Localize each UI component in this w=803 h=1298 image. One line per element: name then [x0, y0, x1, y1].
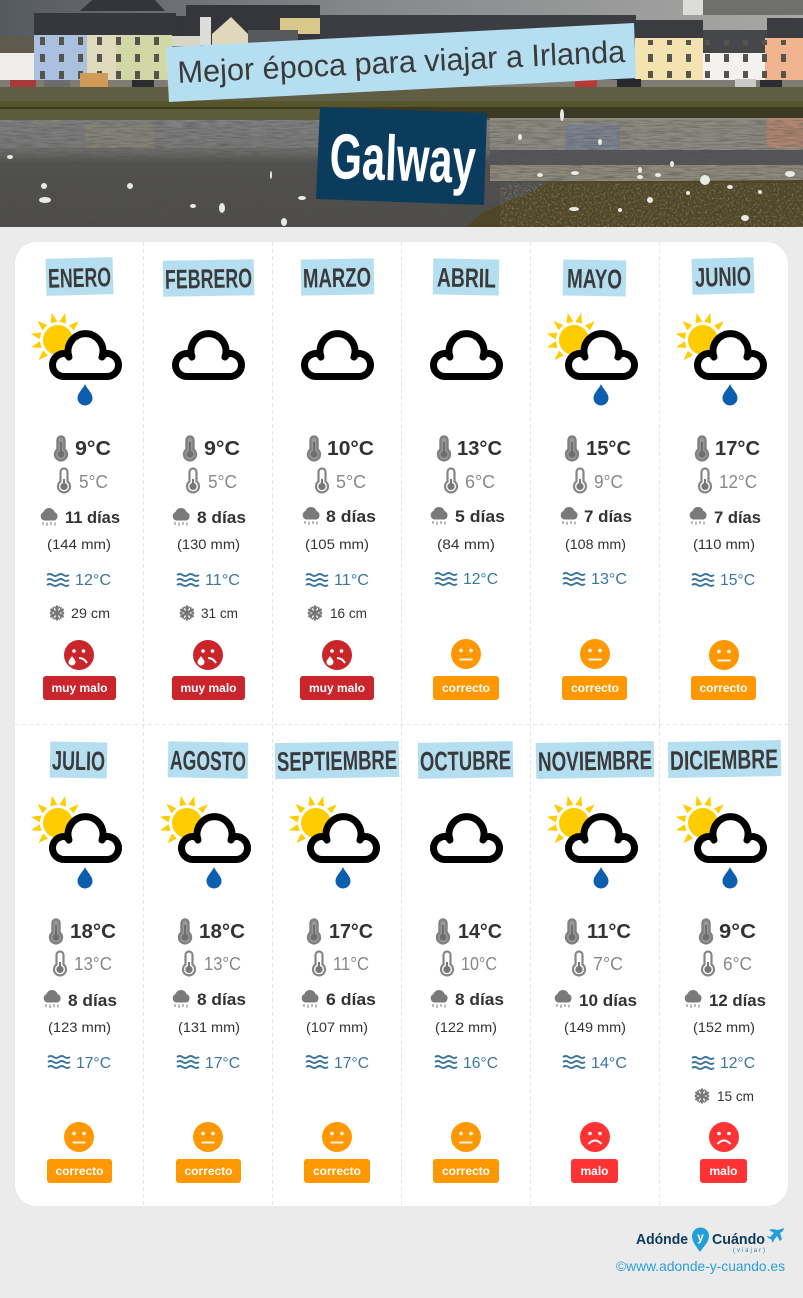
- sea temperature: 11°C: [205, 572, 240, 589]
- website link: ©www.adonde-y-cuando.es: [616, 1258, 785, 1274]
- logo: Adónde y Cuándo: Cuándo: [712, 1231, 765, 1248]
- sea temperature: [435, 1055, 498, 1072]
- sea temperature: [692, 1055, 755, 1072]
- rating: muy malo: [172, 640, 245, 700]
- snow: 16 cm: [330, 605, 367, 621]
- min temperature: 11°C: [333, 954, 369, 974]
- heading: febrero: FEBRERO: [165, 263, 252, 295]
- rainy days: 8 días: [68, 991, 117, 1010]
- icon: cloud: [304, 334, 370, 376]
- rainfall: (130 mm): [177, 536, 240, 552]
- logo: Adónde y Cuándo: (viajar): [733, 1248, 765, 1254]
- month: noviembre: [536, 741, 654, 1183]
- rainy days: [173, 508, 246, 527]
- rainy days: [685, 990, 766, 1010]
- header photo: Galway waterfront: [0, 0, 803, 227]
- rainy days: 12 días: [709, 991, 766, 1010]
- icon: sun, cloud and rain: [159, 795, 248, 888]
- title ribbon: [166, 23, 636, 102]
- rainfall: (152 mm): [693, 1019, 755, 1035]
- month: junio: [675, 257, 764, 700]
- heading: febrero: [163, 259, 254, 297]
- heading: agosto: AGOSTO: [170, 745, 246, 777]
- rainy days: [431, 990, 504, 1009]
- month: abril: [431, 258, 505, 700]
- heading: junio: JUNIO: [695, 261, 751, 293]
- heading: mayo: MAYO: [567, 264, 622, 294]
- icon: sun, cloud and rain: [546, 312, 634, 406]
- rainy days: [303, 507, 376, 526]
- min temperature: 5°C: [208, 472, 237, 492]
- rainy days: 7 días: [584, 507, 632, 526]
- heading: noviembre: NOVIEMBRE: [538, 745, 652, 777]
- heading: abril: ABRIL: [437, 262, 496, 294]
- rating: correcto: correcto: [184, 1164, 233, 1178]
- max temperature: 10°C: [327, 438, 374, 460]
- heading: octubre: OCTUBRE: [420, 745, 511, 777]
- sea temperature: 12°C: [463, 571, 498, 588]
- min temperature: [183, 952, 241, 975]
- icon: map pin: y: [697, 1230, 704, 1244]
- max temperature: 17°C: [329, 921, 373, 943]
- snow: 31 cm: [201, 605, 238, 621]
- rainfall: (131 mm): [178, 1019, 240, 1035]
- heading: abril: [433, 258, 499, 296]
- min temperature: 9°C: [594, 472, 623, 492]
- icon: sun, cloud and rain: [675, 312, 764, 406]
- sea temperature: 14°C: [591, 1055, 627, 1072]
- rainfall: (110 mm): [693, 536, 755, 552]
- rating: malo: [700, 1122, 747, 1183]
- snow: 29 cm: [71, 605, 110, 621]
- max temperature: 18°C: [199, 921, 245, 943]
- sea temperature: 12°C: [75, 572, 111, 589]
- max temperature: [438, 436, 502, 460]
- heading: enero: ENERO: [48, 262, 111, 294]
- heading: octubre: [418, 741, 513, 779]
- min temperature: [445, 468, 495, 492]
- rating: correcto: correcto: [442, 1164, 490, 1178]
- sea temperature: [563, 1055, 627, 1072]
- min temperature: 10°C: [461, 954, 497, 974]
- min temperature: 5°C: [336, 472, 366, 492]
- month: septiembre: [275, 741, 399, 1183]
- rating: correcto: correcto: [699, 681, 748, 695]
- snow: [308, 605, 367, 621]
- sea temperature: [177, 572, 240, 589]
- rating: correcto: correcto: [571, 681, 619, 695]
- max temperature: 17°C: [715, 438, 760, 460]
- max temperature: 15°C: [586, 438, 631, 460]
- max temperature: [184, 436, 240, 460]
- month: enero: [30, 257, 120, 700]
- sea temperature: 11°C: [334, 572, 369, 589]
- max temperature: 9°C: [204, 438, 240, 460]
- rating: correcto: correcto: [313, 1164, 361, 1178]
- sea temperature: [177, 1055, 240, 1072]
- rating: malo: [571, 1122, 618, 1183]
- city name: Galway: [316, 107, 487, 205]
- sea temperature: 17°C: [76, 1055, 111, 1072]
- month: octubre: [418, 741, 513, 1183]
- panel: monthly climate card: [15, 242, 788, 1206]
- month: julio: [30, 741, 118, 1183]
- rainfall: (149 mm): [564, 1019, 626, 1035]
- rainy days: 10 días: [579, 991, 637, 1010]
- heading: agosto: [168, 741, 248, 779]
- heading: septiembre: [275, 741, 399, 779]
- rainy days: 8 días: [197, 508, 246, 527]
- min temperature: [316, 468, 366, 492]
- heading: julio: JULIO: [52, 746, 105, 776]
- min temperature: [58, 468, 108, 492]
- snow: [696, 1088, 754, 1104]
- rating: correcto: [562, 639, 627, 700]
- heading: noviembre: [536, 741, 654, 779]
- rainfall: (105 mm): [305, 536, 369, 552]
- heading: septiembre: SEPTIEMBRE: [277, 745, 397, 777]
- max temperature: [50, 920, 116, 943]
- max temperature: 14°C: [458, 921, 502, 943]
- max temperature: [566, 920, 631, 943]
- heading: enero: [46, 257, 113, 296]
- heading: marzo: [301, 258, 374, 296]
- sea temperature: [48, 1055, 111, 1072]
- max temperature: [566, 436, 631, 460]
- rating: correcto: [691, 640, 756, 700]
- rainy days: [302, 990, 376, 1009]
- month: marzo: [300, 258, 376, 700]
- rating: correcto: [433, 639, 499, 700]
- rating: muy malo: muy malo: [51, 681, 108, 695]
- rating: correcto: [433, 1122, 499, 1183]
- rainy days: [690, 507, 761, 527]
- sea temperature: 17°C: [334, 1055, 369, 1072]
- min temperature: 12°C: [719, 472, 757, 492]
- icon: sun, cloud and rain: [30, 795, 118, 888]
- icon: sun, cloud and rain: [675, 795, 764, 888]
- max temperature: 11°C: [587, 921, 631, 943]
- rating: correcto: [47, 1122, 112, 1183]
- logo: Adónde y Cuándo: [636, 1228, 784, 1254]
- rating: correcto: [176, 1122, 241, 1183]
- snow: [180, 605, 238, 621]
- sea temperature: [47, 572, 111, 589]
- icon: map pin: [692, 1228, 709, 1252]
- min temperature: [573, 952, 623, 975]
- sea temperature: [692, 572, 755, 589]
- heading: julio: [50, 741, 107, 778]
- city name: Galway: Galway: [329, 120, 477, 197]
- rating: correcto: correcto: [442, 681, 490, 695]
- rainy days: [555, 990, 637, 1010]
- min temperature: [699, 468, 757, 492]
- sea temperature: [563, 571, 627, 588]
- rainy days: 8 días: [455, 990, 504, 1009]
- rainfall: (107 mm): [306, 1019, 368, 1035]
- rainy days: [41, 508, 120, 527]
- min temperature: [187, 468, 237, 492]
- min temperature: [574, 468, 623, 492]
- icon: cloud: [434, 334, 500, 376]
- max temperature: [308, 920, 373, 943]
- sea temperature: 17°C: [205, 1055, 240, 1072]
- rating: correcto: [304, 1122, 370, 1183]
- rainy days: [431, 507, 505, 526]
- month: febrero: [163, 259, 254, 700]
- min temperature: 13°C: [74, 954, 112, 974]
- max temperature: [308, 436, 374, 460]
- min temperature: [702, 952, 752, 975]
- rainy days: 6 días: [326, 990, 376, 1009]
- min temperature: 5°C: [79, 472, 108, 492]
- icon: sun, cloud and rain: [30, 312, 118, 406]
- min temperature: 7°C: [593, 954, 623, 974]
- min temperature: [54, 952, 112, 975]
- rating: muy malo: muy malo: [180, 681, 237, 695]
- min temperature: 6°C: [723, 954, 752, 974]
- title ribbon: Mejor época para viajar a Irlanda: [177, 34, 627, 90]
- rainy days: 7 días: [714, 508, 761, 527]
- rating: muy malo: [43, 640, 116, 700]
- sea temperature: 13°C: [591, 571, 627, 588]
- sea temperature: [435, 571, 498, 588]
- rating: malo: malo: [709, 1164, 738, 1178]
- min temperature: 6°C: [465, 472, 495, 492]
- rainfall: (108 mm): [565, 536, 626, 552]
- snow: 15 cm: [717, 1088, 754, 1104]
- rating: muy malo: [300, 640, 374, 700]
- icon: cloud: [434, 817, 500, 860]
- max temperature: 13°C: [457, 438, 502, 460]
- max temperature: 18°C: [70, 921, 116, 943]
- icon: cloud: [176, 334, 242, 376]
- sea temperature: 15°C: [720, 572, 755, 589]
- max temperature: 9°C: [719, 921, 756, 943]
- max temperature: [179, 920, 245, 943]
- max temperature: [437, 920, 502, 943]
- rainfall: (123 mm): [48, 1019, 111, 1035]
- rainy days: 5 días: [455, 507, 505, 526]
- min temperature: [441, 952, 497, 975]
- icon: sun, cloud and rain: [288, 795, 376, 888]
- heading: marzo: MARZO: [303, 262, 371, 294]
- rainy days: 11 días: [65, 508, 120, 527]
- rating: malo: malo: [580, 1164, 609, 1178]
- month: agosto: [159, 741, 248, 1183]
- month: mayo: [546, 259, 634, 700]
- logo: Adónde y Cuándo: Adónde: [636, 1231, 688, 1248]
- rainy days: [561, 507, 632, 526]
- rainfall: (122 mm): [435, 1019, 497, 1035]
- max temperature: [696, 436, 760, 460]
- rainy days: 8 días: [326, 507, 376, 526]
- rainfall: (144 mm): [47, 536, 111, 552]
- month: diciembre: [668, 740, 781, 1183]
- heading: junio: [692, 257, 754, 295]
- rainy days: [173, 990, 246, 1009]
- rainy days: 8 días: [197, 990, 246, 1009]
- icon: sun, cloud and rain: [546, 795, 634, 888]
- max temperature: 9°C: [75, 438, 111, 460]
- heading: mayo: [563, 259, 626, 297]
- rainfall: (84 mm): [437, 536, 495, 552]
- max temperature: [700, 920, 756, 943]
- rainy days: [44, 990, 117, 1010]
- sea temperature: [306, 1055, 369, 1072]
- sea temperature: 12°C: [720, 1055, 755, 1072]
- rating: muy malo: muy malo: [309, 681, 365, 695]
- min temperature: 13°C: [204, 954, 241, 974]
- sea temperature: 16°C: [463, 1055, 498, 1072]
- sea temperature: [306, 572, 369, 589]
- min temperature: [313, 952, 369, 975]
- max temperature: [55, 436, 111, 460]
- icon: plane: [767, 1228, 784, 1243]
- rating: correcto: correcto: [55, 1164, 104, 1178]
- snow: [50, 605, 110, 621]
